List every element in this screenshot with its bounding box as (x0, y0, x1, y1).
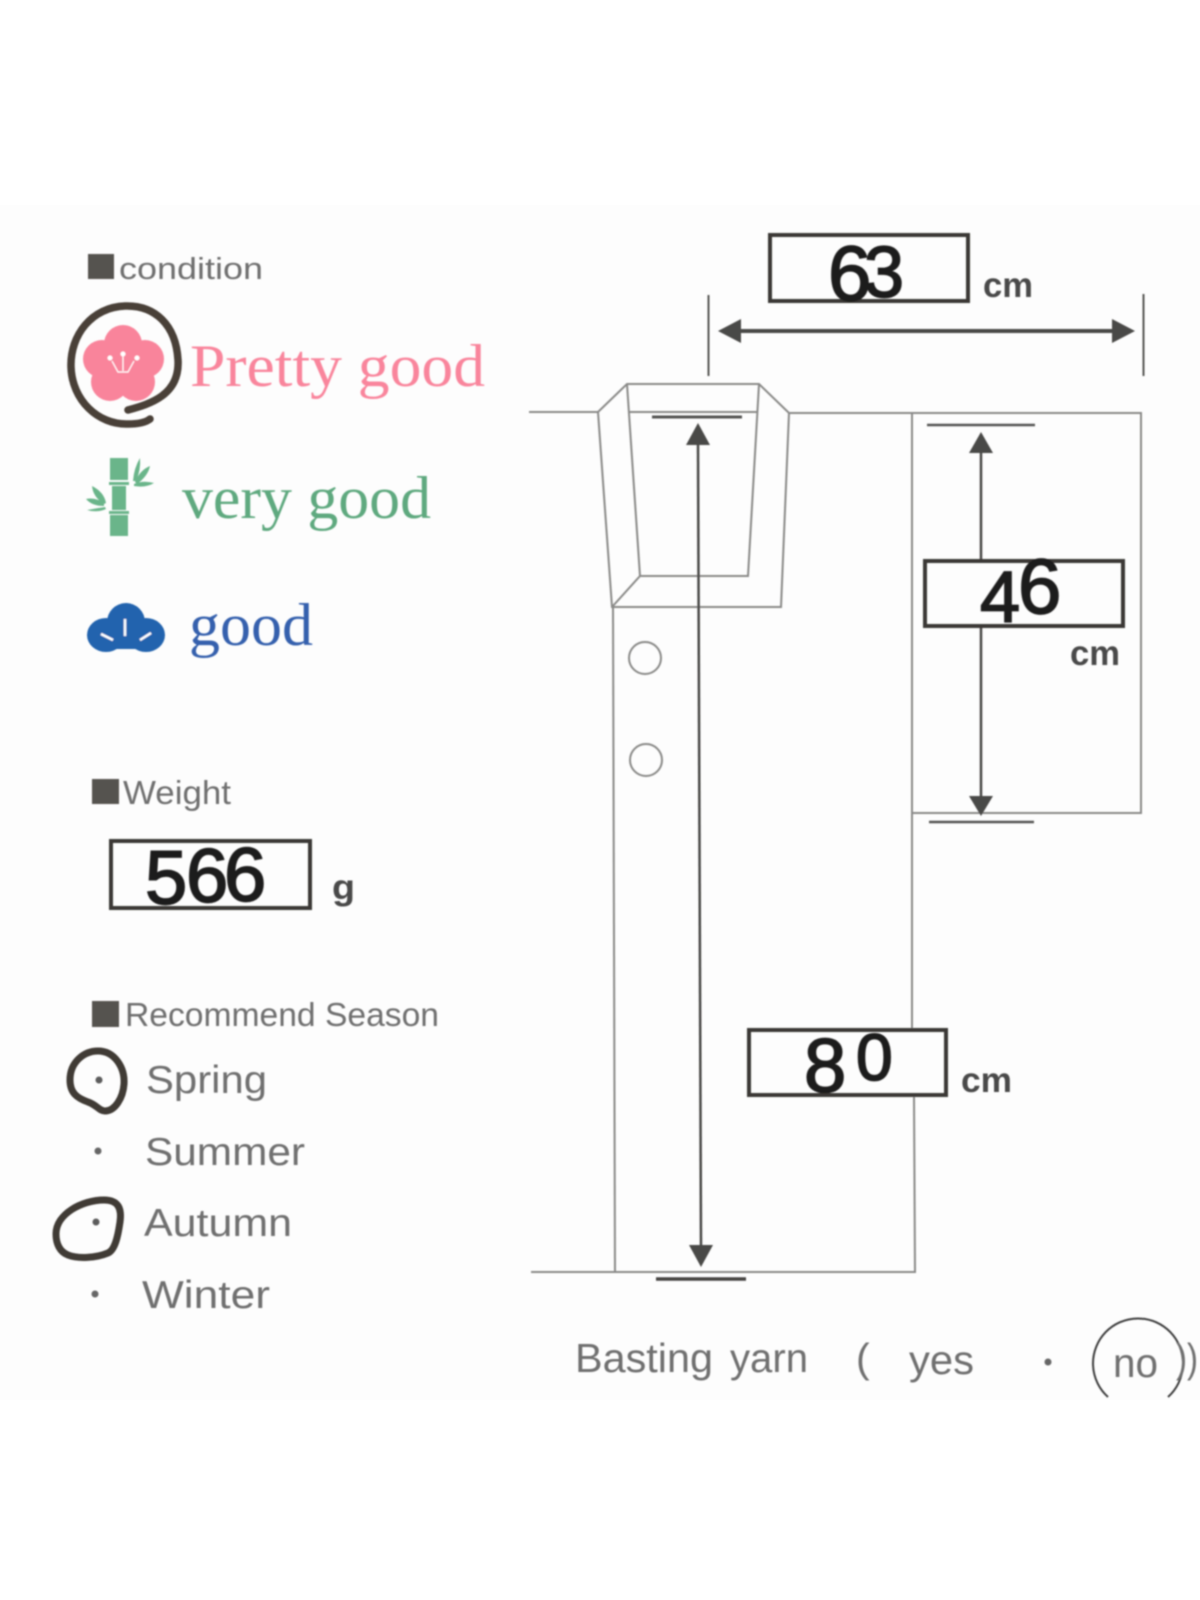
length value box: 8 (804, 1024, 846, 1109)
rating: pretty good: Pretty good (190, 333, 485, 399)
rating: very good: very good (182, 465, 431, 531)
basting yarn line: yes (909, 1337, 974, 1383)
basting yarn line: yarn (730, 1335, 808, 1381)
length dimension arrow (652, 417, 746, 1279)
width value box: 6 (828, 229, 871, 317)
icon: bamboo (86, 458, 154, 536)
basting yarn line: no (1113, 1340, 1158, 1386)
sleeve value box: 4 (980, 558, 1020, 638)
panel: condition (71, 251, 485, 658)
season: summer: Summer (145, 1131, 305, 1174)
season: spring, circled (70, 1051, 267, 1111)
length value box (749, 1020, 946, 1109)
heading: weight: Weight (123, 774, 231, 811)
season: winter: Winter (142, 1274, 270, 1317)
basting yarn line: ( (856, 1335, 870, 1381)
panel: garment diagram (529, 229, 1144, 1279)
buttons (629, 642, 662, 776)
width value box: 3 (864, 233, 904, 313)
heading: recommend season: Recommend Season (125, 996, 439, 1033)
basting yarn line: Basting (575, 1335, 713, 1381)
basting yarn line (575, 1318, 1198, 1397)
rating: good: good (189, 592, 313, 658)
sleeve dimension arrow (927, 425, 1035, 822)
heading: condition: condition (119, 251, 263, 286)
sleeve value box: 6 (1018, 542, 1061, 630)
season: autumn, circled (56, 1200, 292, 1257)
unit: cm: cm (961, 1061, 1012, 1100)
panel: weight (92, 774, 355, 921)
width dimension arrow (708, 294, 1144, 376)
unit: cm: cm (1070, 634, 1120, 673)
panel: recommend season (56, 996, 439, 1317)
unit: g: g (332, 868, 355, 907)
sleeve value box (925, 542, 1123, 638)
icon: pine tree (87, 603, 165, 652)
season: autumn, circled: Autumn (144, 1202, 292, 1245)
garment outline (529, 384, 1141, 1272)
icon: plum blossom in brush circle (71, 306, 178, 424)
unit: cm: cm (983, 266, 1033, 305)
width value box (770, 229, 968, 317)
season: winter (92, 1274, 270, 1317)
weight value box (111, 833, 310, 921)
length value box: 0 (856, 1020, 893, 1094)
circled answer: no (1093, 1318, 1183, 1397)
season: spring, circled: Spring (146, 1059, 267, 1102)
weight value box: 566 (145, 833, 266, 921)
